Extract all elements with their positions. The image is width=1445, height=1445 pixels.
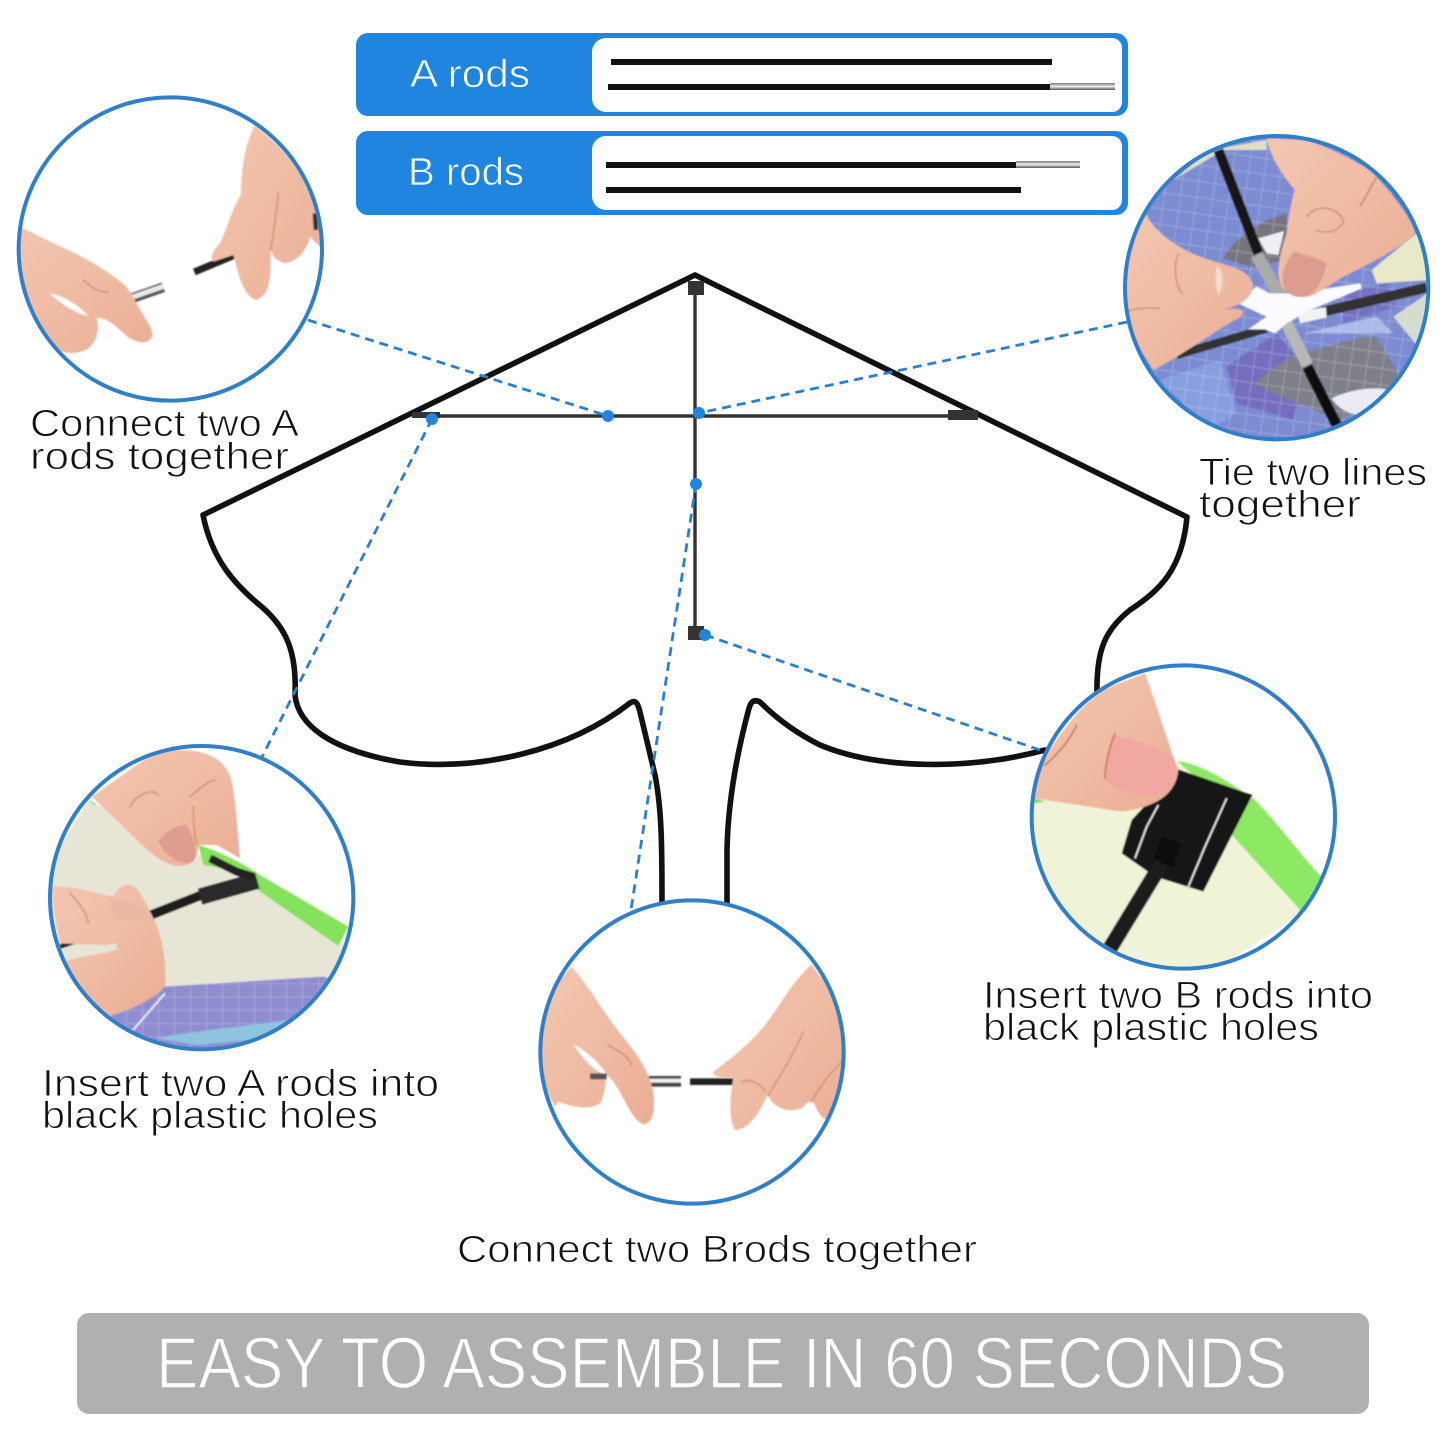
rod: A rod with metal sleeve [608,83,1115,90]
caption: insert two B rods: black plastic holes [983,1007,1319,1049]
green binding [1177,761,1322,912]
thumb [1032,673,1178,812]
ring [1032,665,1335,969]
kite outline: left side [203,275,695,905]
caption: insert two A rods: black plastic holes [42,1095,378,1137]
black rod [194,255,235,272]
ribbon knot [1237,283,1362,333]
caption: connect two A rods: Connect two A [30,403,300,445]
caption: connect two A rods: rods together [30,436,289,478]
rod: B rod plain [606,187,1021,193]
plastic holders [412,281,978,640]
right hand [212,125,323,300]
caption: insert two B rods: Insert two B rods into [983,975,1373,1017]
caption: connect two A rods [30,403,300,478]
rod connector and rod [1163,840,1172,863]
left hand [538,967,654,1124]
black velcro tab [1122,769,1252,892]
caption: tie two lines together: Tie two lines [1199,452,1427,494]
caption: connect two B rods: Connect two Brods together [457,1229,977,1271]
ring [19,97,322,401]
metal tube [647,1076,681,1087]
rod: A rod plain [611,59,1052,65]
stitching [1135,798,1227,887]
rod label [1297,307,1327,323]
panel: A rods [356,33,1128,116]
rods [1218,150,1258,253]
kite fabric [1034,764,1300,967]
black rod [690,1078,735,1085]
left hand [20,227,154,354]
photo circle: connect two A rods [7,97,323,401]
right hand [1267,138,1415,297]
caption: insert two A rods: Insert two A rods into [42,1063,439,1105]
photo circle: insert two A rods [50,746,353,1050]
right hand [713,964,847,1130]
callout dashed leader lines [262,320,1127,910]
ring [50,746,353,1049]
label: A rods: A rods [410,53,530,96]
caption: insert two A rods [42,1063,439,1137]
green binding [88,798,348,946]
ring [540,900,844,1204]
caption: insert two B rods [983,975,1373,1049]
left hand [1120,215,1253,370]
banner: easy to assemble [77,1313,1369,1414]
metal tube [80,311,100,318]
black rod and elbow [60,942,76,950]
upper fingers [92,750,240,866]
kite fabric [52,800,344,1017]
ring [1125,136,1428,439]
panel: B rods [356,131,1128,215]
lower hand [50,885,165,1016]
caption: tie two lines together: together [1199,484,1361,526]
banner heading: EASY TO ASSEMBLE IN 60 SECONDS [156,1324,1287,1404]
kite frame diagram [203,275,1187,905]
cross rods [425,285,975,640]
photo circle: tie two lines together [1123,134,1430,442]
kite outline: right side [695,275,1187,905]
photo circle: insert two B rods [1028,665,1335,970]
callout anchor dots [426,407,711,641]
photo circle: connect two B rods [538,900,847,1204]
caption: tie two lines together [1199,452,1427,526]
rod: B rod with metal sleeve [606,161,1080,168]
label: B rods: B rods [408,151,524,194]
kite fabric [1146,138,1426,427]
